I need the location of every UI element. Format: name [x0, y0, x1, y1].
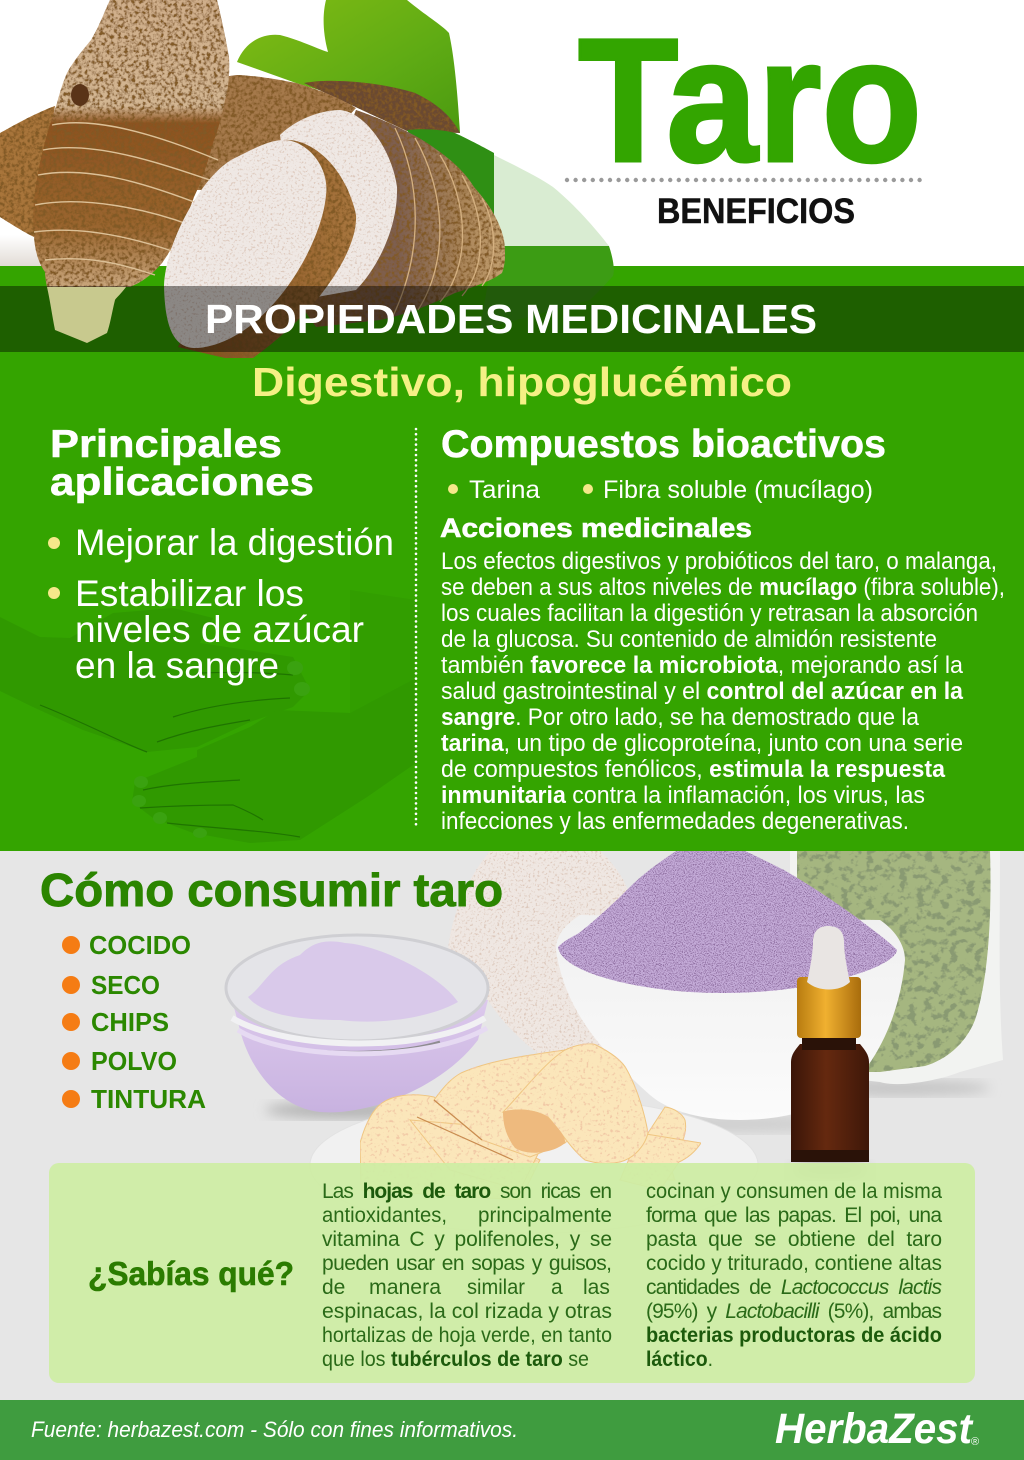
text column 2: láctico.: [646, 1348, 713, 1371]
text column 2: cocido y triturado, contiene altas: [646, 1252, 942, 1275]
image: taro roots with cut slices: [0, 0, 505, 358]
list: consumption forms: SECO: [91, 970, 160, 1000]
heading: main applications: Principales: [50, 423, 282, 466]
dotted column divider: [415, 429, 417, 829]
list: consumption forms: POLVO: [91, 1046, 177, 1076]
text column 1: de: [322, 1276, 345, 1299]
text column 2: bacterias productoras de ácido: [646, 1324, 942, 1347]
text column 1: espinacas, la col rizada y otras: [322, 1300, 612, 1323]
list: consumption forms: CHIPS: [91, 1007, 169, 1037]
text block: medicinal actions: [441, 548, 1005, 835]
image: white taro half: [448, 851, 670, 1055]
heading: main applications: [50, 423, 314, 504]
text column 1: manera: [369, 1276, 441, 1299]
panel: main applications: [48, 423, 394, 686]
image: bowl of purple powder: [556, 851, 905, 1133]
heading: bioactive compounds: Compuestos bioactivos: [441, 423, 886, 466]
text block: medicinal actions: salud gastrointestinal y el control del azúcar en la: [441, 678, 964, 705]
image: taro root stem: [47, 287, 126, 343]
panel: how to consume background: [0, 851, 1024, 1400]
footer logo: ®: [971, 1436, 979, 1448]
text block: medicinal actions: se deben a sus altos niveles de mucílago (fibra soluble),: [441, 574, 1005, 601]
dark banner band: [0, 286, 1024, 352]
panel: medicinal properties green background: [0, 266, 1024, 851]
text column 1: Las hojas de taro son ricas en: [322, 1180, 612, 1203]
text column 1: principalmente: [478, 1204, 612, 1227]
list: applications: niveles de azúcar: [75, 609, 364, 650]
text column 1: que los tubérculos de taro se: [322, 1348, 589, 1371]
text block: medicinal actions: también favorece la microbiota, mejorando así la: [441, 652, 964, 679]
image: leaves behind the taro: [237, 0, 614, 330]
text column 1: vitamina C y polifenoles, y se: [322, 1228, 612, 1251]
list: applications: Mejorar la digestión: [75, 522, 394, 563]
list: consumption forms: [62, 930, 206, 1114]
text column 2: pasta que se obtiene del taro: [646, 1228, 942, 1251]
text column 1: pueden usar en sopas y guisos,: [322, 1252, 612, 1275]
list: consumption forms: TINTURA: [91, 1084, 206, 1114]
text column 2: (95%) y Lactobacilli (5%), ambas: [646, 1300, 942, 1323]
text column 2: cantidades de Lactococcus lactis: [646, 1276, 942, 1299]
banner heading: PROPIEDADES MEDICINALES: [205, 296, 817, 342]
footer logo: HerbaZest: [775, 1405, 974, 1453]
properties subtitle: Digestivo, hipoglucémico: [252, 359, 792, 405]
text block: medicinal actions: los cuales facilitan la digestión y retrasan la absorción: [441, 600, 978, 627]
text column 1: antioxidantes,: [322, 1204, 447, 1227]
panel: did you know: [49, 1163, 975, 1383]
footer source text: Fuente: herbazest.com - Sólo con fines informativos.: [31, 1417, 518, 1442]
title: Taro: [578, 3, 922, 199]
text block: medicinal actions: inmunitaria contra la inflamación, los virus, las: [441, 782, 925, 809]
list: applications: Estabilizar los: [75, 573, 304, 614]
image: hands over the abdomen: [0, 590, 416, 843]
callout box: [49, 1163, 975, 1383]
text column 1: a: [551, 1276, 563, 1299]
image: dropper bottle: [791, 926, 869, 1179]
subtitle: BENEFICIOS: [657, 192, 855, 231]
text block: medicinal actions: tarina, un tipo de glicoproteína, junto con una serie: [441, 730, 963, 757]
text block: medicinal actions: Los efectos digestivos y probióticos del taro, o malanga,: [441, 548, 997, 575]
text column 2: [646, 1180, 942, 1371]
heading: medicinal actions: Acciones medicinales: [440, 513, 752, 543]
image: dried leaves bag: [790, 851, 1003, 1096]
text block: medicinal actions: sangre. Por otro lado, se ha demostrado que la: [441, 704, 920, 731]
heading: did you know: ¿Sabías qué?: [88, 1255, 294, 1292]
list: applications: [48, 522, 394, 686]
list: consumption forms: COCIDO: [89, 930, 191, 960]
text block: medicinal actions: infecciones y las enfermedades degenerativas.: [441, 808, 909, 835]
footer bar: [0, 1400, 1024, 1460]
list: compounds: Tarina: [469, 476, 540, 504]
panel: bioactive compounds: [440, 423, 1005, 835]
heading: main applications: aplicaciones: [50, 461, 314, 504]
text column 2: cocinan y consumen de la misma: [646, 1180, 942, 1203]
image: plate with taro chips: [310, 1044, 758, 1233]
list: compounds: Fibra soluble (mucílago): [603, 476, 873, 504]
text block: medicinal actions: de la glucosa. Su contenido de almidón resistente: [441, 626, 937, 653]
text column 1: hortalizas de hoja verde, en tanto: [322, 1324, 612, 1347]
text column 1: similar: [467, 1276, 525, 1299]
heading: how to consume: Cómo consumir taro: [40, 864, 503, 916]
text block: medicinal actions: de compuestos fenólicos, estimula la respuesta: [441, 756, 946, 783]
text column 1: [322, 1180, 612, 1371]
list: compounds: [448, 476, 873, 504]
floor shadow: [0, 235, 60, 266]
text column 2: forma que las papas. El poi, una: [646, 1204, 942, 1227]
text column 1: las: [583, 1276, 610, 1299]
image: glass bowl with purple cream: [226, 935, 488, 1119]
dotted title divider: [567, 178, 922, 182]
list: applications: en la sangre: [75, 645, 279, 686]
